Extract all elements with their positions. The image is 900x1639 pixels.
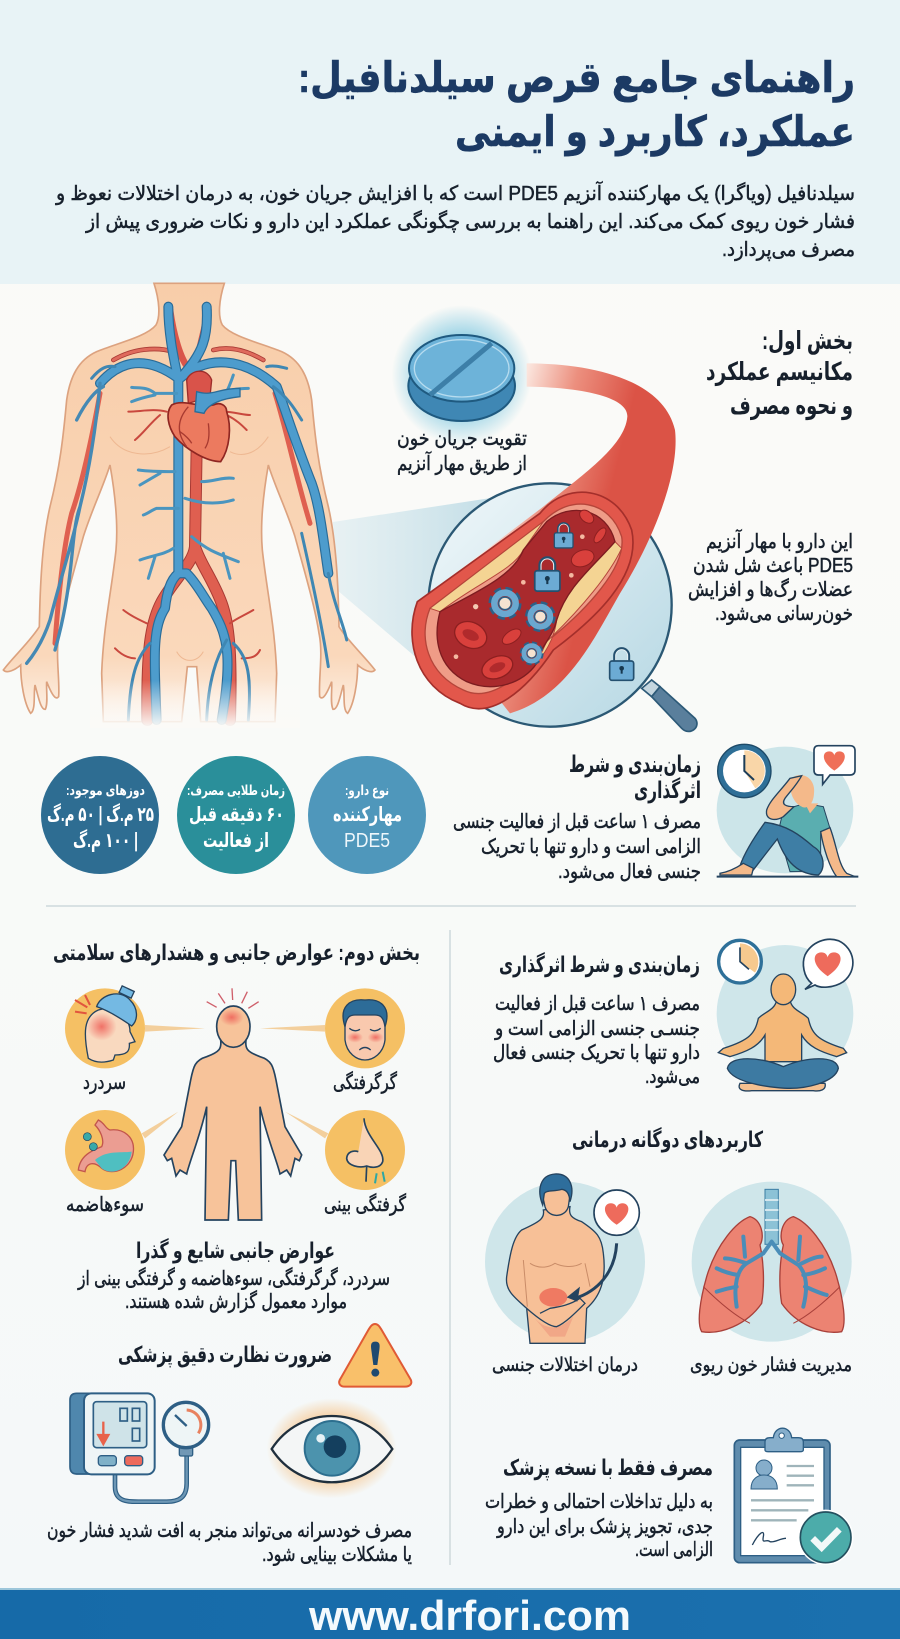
circulatory body illustration [3, 283, 375, 722]
connector lines [142, 1025, 328, 1138]
warning icons group [70, 1324, 411, 1502]
body silhouette [3, 283, 375, 722]
common side effects text [77, 1237, 390, 1313]
stat circle: drug type: نوع دارو: [345, 782, 389, 799]
pill, vessel and magnifier [392, 305, 697, 731]
stat circle: doses: ۲۵ م.گ | ۵۰ م.گ [47, 803, 154, 826]
right column illustrations [485, 939, 853, 1343]
chest contours [110, 437, 268, 660]
timing text block one: جنسی فعال می‌شود. [558, 861, 701, 883]
timing text block one: مصرف ۱ ساعت قبل از فعالیت جنسی [453, 811, 701, 833]
timing text block one: الزامی است و دارو تنها با تحریک [481, 836, 701, 858]
icon: blood pressure monitor [70, 1393, 209, 1502]
stat circle: doses [41, 756, 159, 874]
stat circle: golden time: از فعالیت [203, 830, 269, 852]
prescription text: الزامی است. [635, 1539, 713, 1561]
footer band: www.drfori.com [308, 1592, 631, 1639]
side effect labels: سردرد [83, 1072, 126, 1094]
intro paragraph: مصرف می‌پردازد. [722, 239, 855, 262]
section two heading: بخش دوم: عوارض جانبی و هشدارهای سلامتی [53, 940, 420, 966]
warning paragraph: یا مشکلات بینایی شود. [262, 1544, 412, 1566]
intro paragraph: سیلدنافیل (ویاگرا) یک مهارکننده آنزیم PDE5 است که با افزایش جریان خون، به درمان اختلالات نعوظ و [55, 180, 855, 205]
timing text block one [453, 751, 701, 883]
warning paragraph: مصرف خودسرانه می‌تواند منجر به افت شدید فشار خون [47, 1520, 412, 1542]
zoom beam from arm to magnifier [333, 486, 570, 665]
common side effects text: سردرد، گرگرفتگی، سوءهاضمه و گرفتگی بینی از [77, 1267, 390, 1290]
prescription text: مصرف فقط با نسخه پزشک [503, 1455, 713, 1481]
common side effects text: موارد معمول گزارش شده هستند. [125, 1290, 347, 1313]
icon: seated person with clock [717, 744, 858, 877]
stat circle: golden time: زمان طلایی مصرف: [187, 782, 285, 799]
title [298, 54, 855, 157]
header band [0, 0, 900, 284]
lower body fade [90, 680, 300, 728]
icon: pill [392, 305, 532, 445]
icon: warning triangle [339, 1324, 411, 1387]
timing text block two: جنسـی جنسی الزامی است و [494, 1018, 700, 1040]
prescription text: جدی، تجویز پزشک برای این دارو [496, 1516, 713, 1539]
pill caption: تقویت جریان خون [397, 428, 527, 450]
side effect labels [66, 1071, 406, 1216]
side effect labels: سوءهاضمه [66, 1194, 144, 1216]
mechanism paragraph: خون‌رسانی می‌شود. [715, 603, 853, 625]
therapeutic use labels [492, 1355, 852, 1376]
intro paragraph [55, 180, 855, 262]
timing text block two [493, 951, 700, 1088]
magnifier [428, 483, 697, 731]
stat circle: golden time [177, 756, 295, 874]
icon: lungs [692, 1182, 852, 1342]
section one heading: و نحوه مصرف [730, 392, 853, 421]
side effect labels: گرفتگی بینی [324, 1193, 406, 1216]
common side effects text: عوارض جانبی شایع و گذرا [136, 1237, 335, 1264]
icon: clipboard with check [734, 1428, 853, 1565]
stat circle: drug type: PDE5 [344, 830, 390, 852]
timing text block one: زمان‌بندی و شرط [569, 751, 701, 778]
mechanism paragraph: عضلات رگ‌ها و افزایش [688, 578, 853, 601]
therapeutic uses heading: کاربردهای دوگانه درمانی [572, 1126, 763, 1153]
icon: meditating person [717, 939, 853, 1091]
timing text block two: می‌شود. [645, 1066, 700, 1088]
veins [27, 307, 347, 720]
icon: stomach [65, 1110, 145, 1190]
mechanism paragraph [688, 528, 853, 625]
timing text block two: زمان‌بندی و شرط اثرگذاری [499, 951, 700, 978]
icon: flushing [325, 988, 405, 1068]
pill caption: از طریق مهار آنزیم [397, 450, 527, 475]
intro paragraph: فشار خون ریوی کمک می‌کند. این راهنما به بررسی چگونگی عملکرد این دارو و نکات ضروری پیش از [85, 210, 855, 234]
central body figure [164, 988, 302, 1220]
medical supervision heading: ضرورت نظارت دقیق پزشکی [118, 1342, 332, 1368]
warning paragraph [47, 1520, 412, 1566]
arteries [55, 310, 310, 720]
stat circle: doses: | ۱۰۰ م.گ [73, 829, 138, 852]
therapeutic use labels: مدیریت فشار خون ریوی [690, 1355, 852, 1376]
side effects diagram [65, 986, 405, 1220]
vessel cross-section [412, 492, 633, 709]
footer band [0, 1588, 900, 1639]
mechanism paragraph: این دارو با مهار آنزیم [706, 528, 853, 553]
timing text block two: مصرف ۱ ساعت قبل از فعالیت [495, 993, 700, 1015]
heart [168, 371, 240, 462]
icon: eye [267, 1398, 397, 1498]
section one heading: بخش اول: [762, 327, 853, 356]
stat circle: drug type [308, 756, 426, 874]
timing text block one: اثرگذاری [634, 777, 701, 804]
icon: headache [65, 986, 145, 1068]
section one heading [706, 327, 853, 421]
side effect labels: گرگرفتگی [333, 1071, 397, 1094]
icon: nose [325, 1110, 405, 1190]
stat circle: doses: دوزهای موجود: [66, 782, 145, 799]
icon: man with heart [485, 1174, 645, 1343]
vertical divider [449, 930, 451, 1565]
timing text block two: دارو تنها با تحریک جنسی فعال [493, 1042, 700, 1064]
prescription text [485, 1455, 713, 1561]
horizontal divider [46, 905, 856, 907]
vessel tube [420, 363, 676, 713]
stat circle: drug type: مهارکننده [333, 804, 402, 826]
therapeutic use labels: درمان اختلالات جنسی [492, 1355, 638, 1376]
section one heading: مکانیسم عملکرد [706, 358, 853, 387]
prescription text: به دلیل تداخلات احتمالی و خطرات [485, 1491, 713, 1513]
pill caption [397, 428, 527, 475]
mechanism paragraph: PDE5 باعث شل شدن [693, 555, 853, 577]
stat circle: golden time: ۶۰ دقیقه قبل [189, 804, 284, 826]
